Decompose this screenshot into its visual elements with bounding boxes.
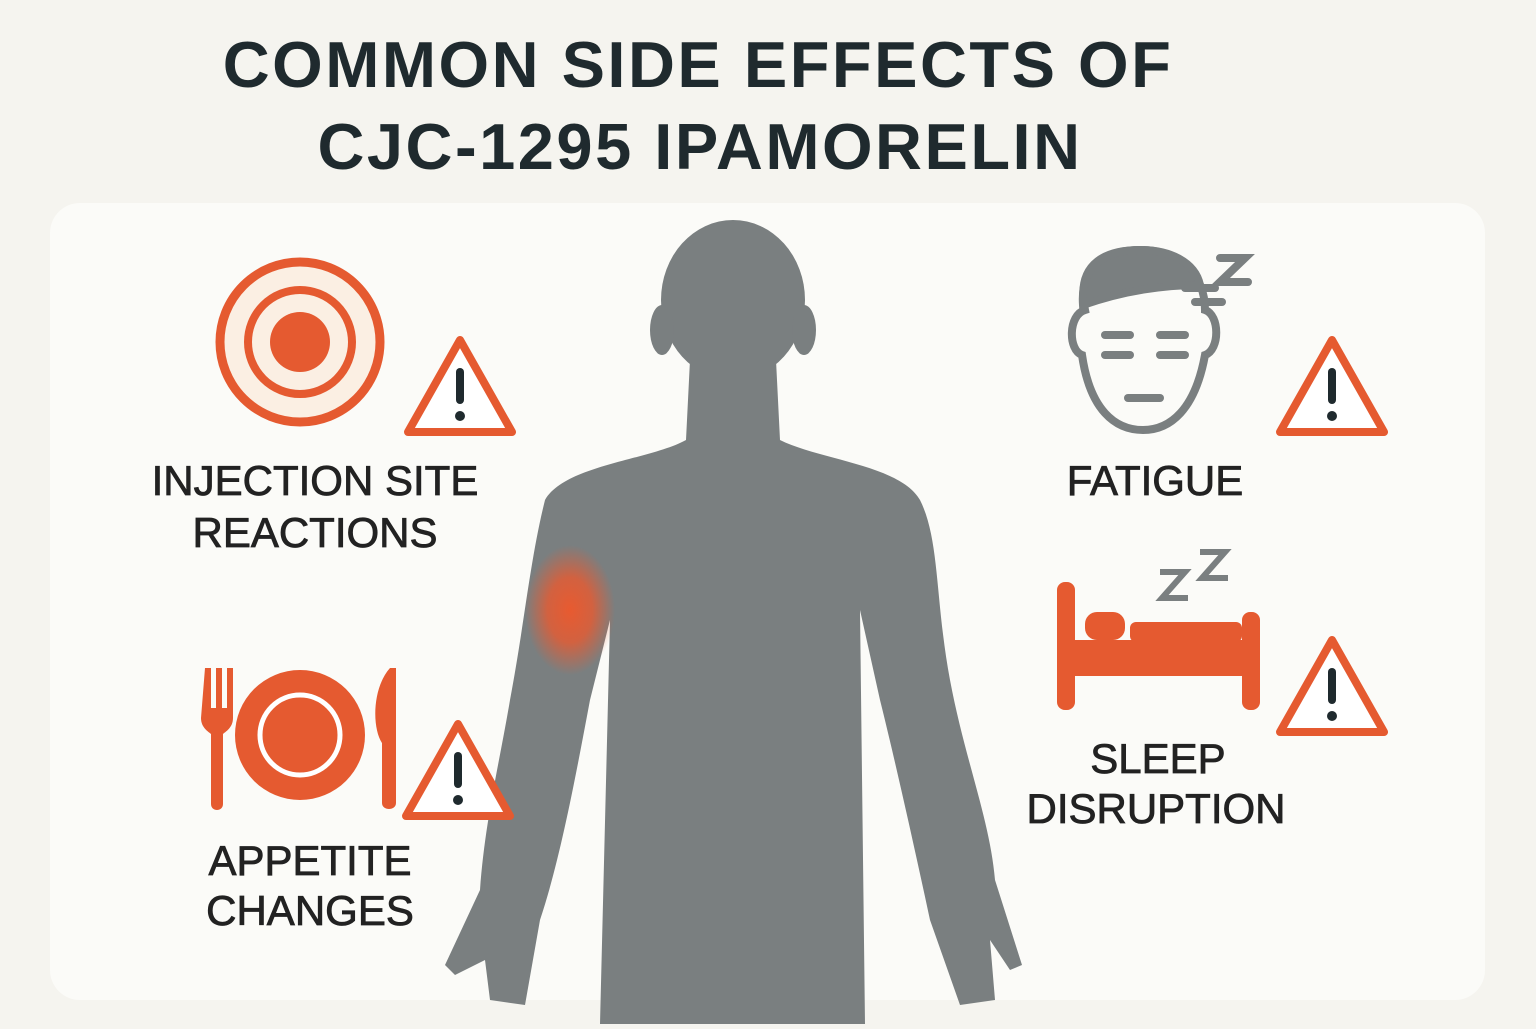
icon: plate and cutlery	[201, 668, 396, 810]
icon: warning 4	[406, 724, 510, 816]
icon: target	[220, 262, 380, 422]
panel: background card	[50, 203, 1485, 1000]
body silhouette	[445, 220, 1022, 1024]
label: sleep disruption	[1026, 735, 1286, 832]
icon: fatigue face	[1072, 250, 1248, 430]
icon: warning 2	[1280, 340, 1384, 432]
label: fatigue: FATIGUE	[1067, 457, 1243, 504]
title: COMMON SIDE EFFECTS OF	[223, 28, 1173, 101]
label: sleep disruption: SLEEP	[1090, 735, 1226, 782]
label: injection site reactions: REACTIONS	[192, 509, 438, 556]
label: appetite changes	[206, 837, 414, 934]
label: injection site reactions	[152, 457, 478, 556]
injection glow on arm	[525, 545, 615, 675]
label: appetite changes: APPETITE	[208, 837, 412, 884]
title: CJC-1295 IPAMORELIN	[317, 110, 1083, 183]
label: injection site reactions: INJECTION SITE	[152, 457, 478, 504]
icon: bed	[1057, 552, 1260, 710]
label: sleep disruption: DISRUPTION	[1026, 785, 1286, 832]
title	[223, 28, 1173, 183]
icon: warning 3	[1280, 640, 1384, 732]
label: appetite changes: CHANGES	[206, 887, 414, 934]
icon: warning 1	[408, 340, 512, 432]
